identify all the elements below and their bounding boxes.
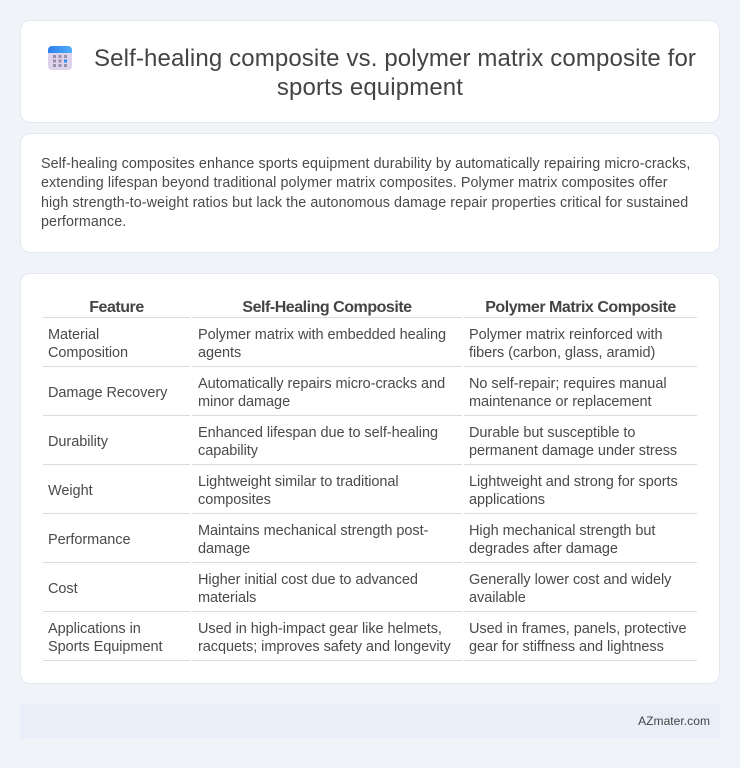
table card: [20, 273, 720, 684]
comparison table: Performance: [48, 532, 130, 548]
comparison table: Polymer Matrix Composite: [485, 299, 676, 316]
intro text: performance.: [41, 214, 126, 230]
comparison table: damage: [198, 541, 250, 557]
intro text: Self-healing composites enhance sports equipment durability by automatically repairing micro-cracks,: [41, 156, 690, 172]
comparison table: materials: [198, 590, 256, 606]
comparison table: Polymer matrix reinforced with: [469, 327, 662, 343]
intro text: [41, 156, 690, 230]
intro text: high strength-to-weight ratios but lack the autonomous damage repair properties critical for sustained: [41, 195, 688, 211]
comparison table: Applications in: [48, 621, 141, 637]
comparison table: Used in frames, panels, protective: [469, 621, 687, 637]
comparison table: capability: [198, 443, 258, 459]
title card: [20, 20, 720, 123]
comparison table: available: [469, 590, 526, 606]
comparison table: High mechanical strength but: [469, 523, 655, 539]
comparison table: Durable but susceptible to: [469, 425, 635, 441]
comparison table: Self-Healing Composite: [242, 299, 412, 316]
comparison table: Lightweight similar to traditional: [198, 474, 399, 490]
comparison table: Automatically repairs micro-cracks and: [198, 376, 445, 392]
comparison table: Enhanced lifespan due to self-healing: [198, 425, 438, 441]
comparison table: maintenance or replacement: [469, 394, 651, 410]
footer credit: AZmater.com: [638, 714, 710, 728]
title: Self-healing composite vs. polymer matrix composite for: [94, 45, 696, 72]
icon: calendar: [48, 46, 72, 70]
comparison table: Material: [48, 327, 99, 343]
comparison table: Polymer matrix with embedded healing: [198, 327, 446, 343]
comparison table: fibers (carbon, glass, aramid): [469, 345, 655, 361]
comparison table: Maintains mechanical strength post-: [198, 523, 428, 539]
intro text: extending lifespan beyond traditional polymer matrix composites. Polymer matrix composites offer: [41, 175, 668, 191]
comparison table: composites: [198, 492, 271, 508]
comparison table: gear for stiffness and lightness: [469, 639, 664, 655]
title: sports equipment: [277, 74, 463, 101]
intro card: [20, 133, 720, 253]
comparison table: racquets; improves safety and longevity: [198, 639, 451, 655]
comparison table: Generally lower cost and widely: [469, 572, 671, 588]
comparison table: Higher initial cost due to advanced: [198, 572, 418, 588]
comparison table: Weight: [48, 483, 93, 499]
table header: Feature: [89, 299, 144, 316]
comparison table: Used in high-impact gear like helmets,: [198, 621, 442, 637]
comparison table: minor damage: [198, 394, 290, 410]
comparison table: Sports Equipment: [48, 639, 162, 655]
title: [94, 45, 696, 101]
comparison table: Lightweight and strong for sports: [469, 474, 678, 490]
comparison table: Damage Recovery: [48, 385, 167, 401]
comparison table: agents: [198, 345, 241, 361]
comparison table: Composition: [48, 345, 128, 361]
comparison table: Cost: [48, 581, 78, 597]
footer bar: [20, 704, 720, 738]
comparison table: No self-repair; requires manual: [469, 376, 667, 392]
comparison table: permanent damage under stress: [469, 443, 677, 459]
comparison table: Durability: [48, 434, 108, 450]
comparison table: applications: [469, 492, 545, 508]
comparison table: degrades after damage: [469, 541, 618, 557]
